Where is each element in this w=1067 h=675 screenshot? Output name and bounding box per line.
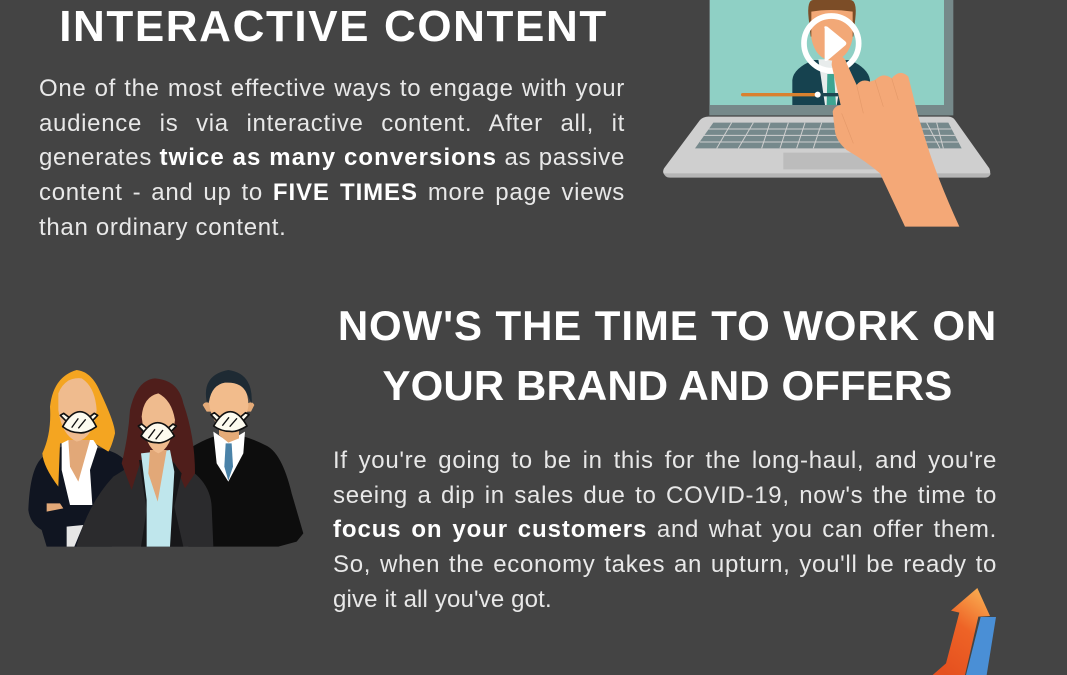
text block: interactive content: generates twice as many conversions as passive (39, 144, 625, 171)
text block: brand and offers: focus on your customers and what you can offer them. (333, 516, 997, 543)
play button (804, 16, 859, 71)
text block: interactive content: than ordinary content. (39, 214, 287, 241)
face masks (60, 412, 249, 443)
icon: rising growth arrow (933, 588, 996, 675)
text block: interactive content: One of the most effective ways to engage with your (39, 75, 625, 102)
icon: laptop with video and pointing hand (663, 0, 991, 227)
text block: interactive content: content - and up to FIVE TIMES more page views (39, 179, 625, 206)
woman with blonde hair (28, 370, 127, 547)
text block: brand and offers: So, when the economy takes an upturn, you'll be ready to (333, 551, 997, 578)
text block: brand and offers (333, 447, 997, 613)
text block: interactive content (39, 75, 625, 241)
progress bar (743, 92, 840, 98)
businessman (188, 370, 303, 547)
hand (832, 55, 959, 227)
heading: now's the time (338, 302, 997, 409)
text block: brand and offers: give it all you've got. (333, 586, 552, 613)
text block: interactive content: audience is via interactive content. After all, it (39, 110, 625, 137)
icon: three businesspeople wearing masks (28, 370, 303, 547)
presenter (792, 0, 870, 105)
text block: brand and offers: If you're going to be in this for the long-haul, and you're (333, 447, 997, 474)
heading: now's the time: NOW'S THE TIME TO WORK ON (338, 302, 997, 349)
heading: interactive content: INTERACTIVE CONTENT (59, 2, 608, 51)
text block: brand and offers: seeing a dip in sales due to COVID-19, now's the time to (333, 482, 997, 509)
woman with auburn hair (77, 378, 213, 547)
heading: now's the time: YOUR BRAND AND OFFERS (383, 362, 952, 409)
